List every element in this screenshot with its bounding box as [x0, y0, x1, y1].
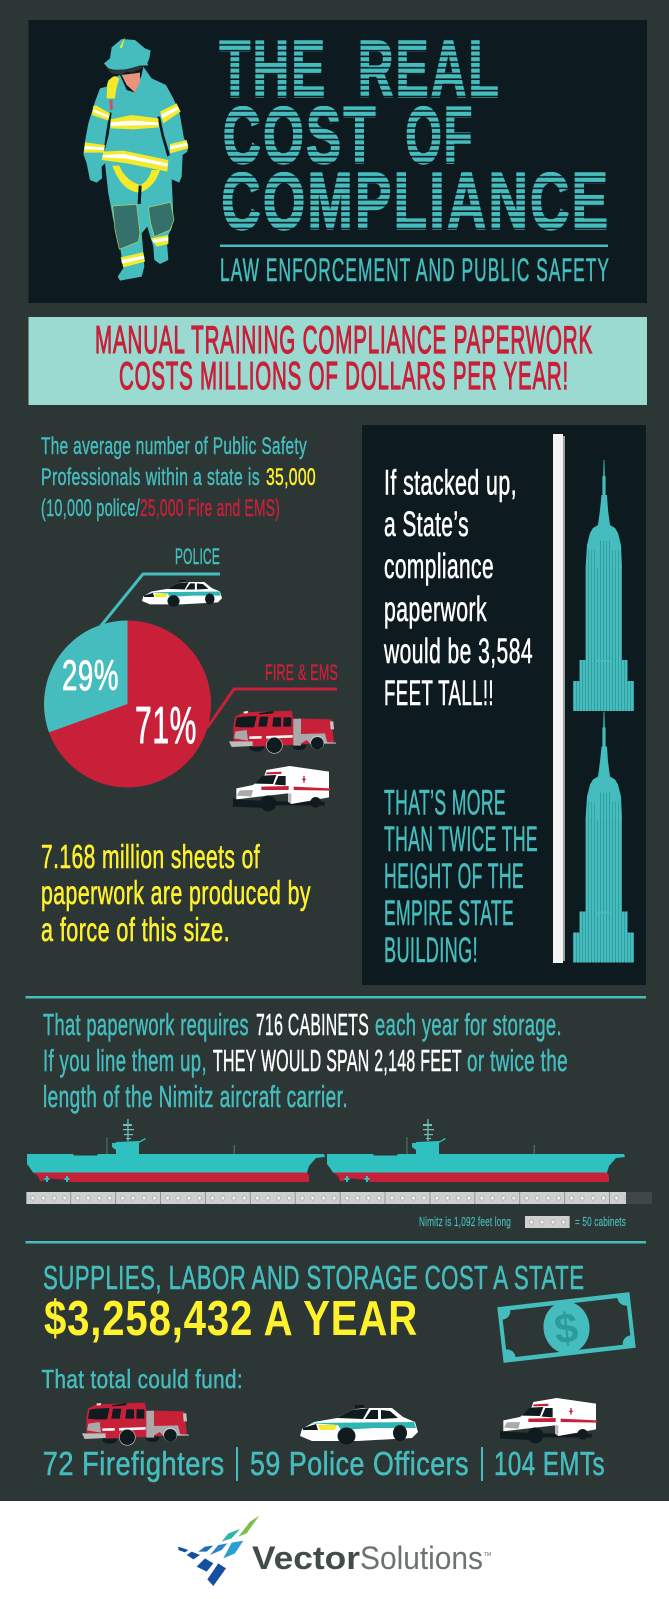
logo wordmark: Vector: [252, 1540, 360, 1576]
icon: aircraft carrier one: [27, 1119, 325, 1182]
text block: cabinets: or twice the: [467, 1044, 568, 1078]
text block: sheets of paperwork: [41, 839, 311, 949]
legend swatch: [525, 1216, 570, 1228]
pie chart: [44, 620, 211, 788]
text block: cabinets: 716 CABINETS: [256, 1008, 369, 1042]
text block: average professionals: Professionals within a state is: [41, 464, 260, 491]
title: THE: [220, 24, 328, 114]
text block: more than twice: [384, 784, 538, 970]
text block: average professionals: 35,000: [266, 464, 316, 491]
text block: more than twice: EMPIRE STATE: [384, 894, 514, 933]
icon: ambulance: [233, 766, 330, 811]
text block: average professionals: The average number of Public Safety: [41, 433, 307, 460]
pie chart: 29%: [62, 652, 119, 700]
icon: police car: [300, 1405, 418, 1444]
text block: sheets of paperwork: 7.168 million sheets of: [41, 839, 260, 876]
callout: police: POLICE: [175, 544, 220, 569]
panel: header: [28, 20, 647, 303]
text: funded positions: 59 Police Officers: [250, 1446, 469, 1483]
icon: firefighter: [83, 37, 188, 281]
text block: average professionals: [41, 433, 316, 522]
text: funded positions: 104 EMTs: [494, 1446, 605, 1483]
footer: [0, 1501, 669, 1599]
text block: stacked: paperwork: [384, 590, 487, 629]
text block: cabinets: [43, 1008, 568, 1114]
text block: cabinets: If you line them up,: [43, 1044, 207, 1078]
text block: stacked: compliance: [384, 547, 494, 586]
text block: average professionals: 25,000 Fire and EMS): [140, 495, 280, 522]
title: OF: [406, 90, 474, 180]
text block: more than twice: HEIGHT OF THE: [384, 857, 524, 896]
icon: empire state building upper: [573, 460, 634, 711]
icon: aircraft carrier two: [327, 1119, 625, 1182]
text block: average professionals: (10,000 police/: [41, 495, 140, 522]
title: REAL: [358, 24, 501, 114]
icon: police car: [142, 580, 222, 607]
text block: sheets of paperwork: a force of this size.: [41, 912, 230, 949]
text block: more than twice: THAT’S MORE: [384, 784, 506, 822]
logo wordmark: TM: [484, 1552, 491, 1558]
icon: fire truck: [82, 1403, 189, 1446]
logo wordmark: [252, 1540, 491, 1576]
icon: dollar bill: $: [552, 1303, 581, 1353]
callout: fire and EMS: [207, 660, 338, 811]
icon: dollar bill: [497, 1292, 636, 1363]
cabinet bar: [26, 1192, 652, 1204]
icon: fire truck: [229, 711, 336, 754]
callout: police: [100, 544, 222, 627]
legend: Nimitz is 1,092 feet long: [419, 1214, 511, 1229]
paper stack: [553, 434, 565, 963]
icon: empire state building lower: [573, 712, 634, 962]
text: funded positions: [43, 1446, 605, 1483]
text block: stacked: a State’s: [384, 505, 469, 544]
text block: sheets of paperwork: paperwork are produced by: [41, 875, 311, 912]
text block: stacked: would be 3,584: [383, 632, 533, 671]
text block: stacked: If stacked up,: [384, 464, 517, 502]
heading: dollar figure: $3,258,432 A YEAR: [44, 1292, 418, 1346]
legend: = 50 cabinets: [575, 1214, 626, 1229]
logo mark: [178, 1516, 259, 1586]
text block: cabinets: That paperwork requires: [43, 1008, 249, 1042]
text block: more than twice: BUILDING!: [384, 931, 478, 970]
pie chart: 71%: [135, 697, 197, 755]
text: could fund: That total could fund:: [42, 1364, 243, 1394]
text block: cabinets: length of the Nimitz aircraft carrier.: [43, 1080, 348, 1114]
title: COST: [223, 90, 378, 180]
banner: [28, 317, 647, 405]
panel: stack comparison: [362, 425, 646, 985]
title: [220, 24, 610, 246]
callout: fire and EMS: FIRE & EMS: [265, 660, 338, 685]
icon: ambulance: [500, 1398, 597, 1443]
text: funded positions: 72 Firefighters: [43, 1446, 225, 1483]
text block: stacked: FEET TALL!!: [384, 674, 494, 713]
text block: stacked: [383, 464, 533, 713]
logo wordmark: Solutions: [360, 1540, 483, 1576]
